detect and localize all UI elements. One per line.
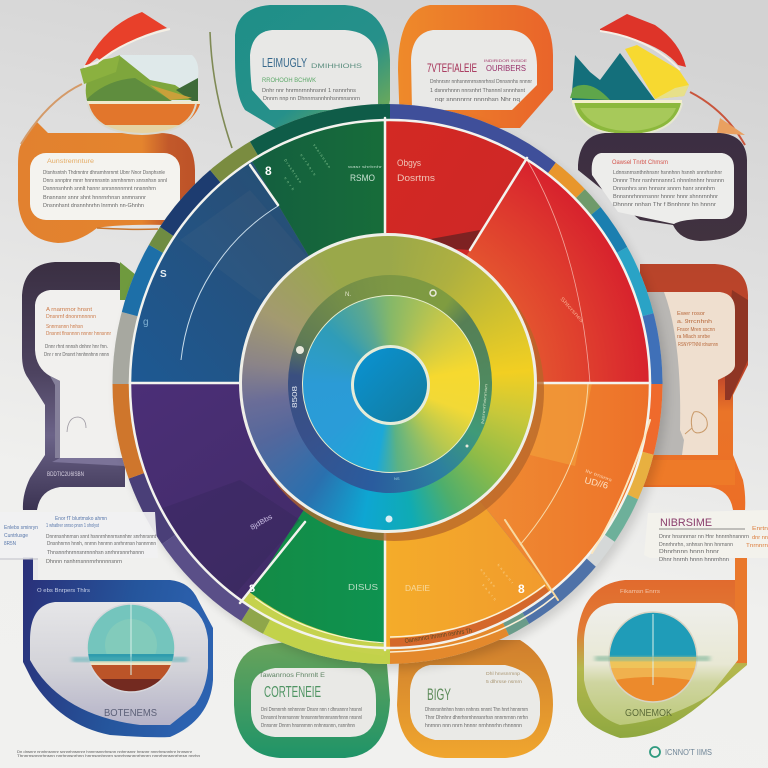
text block: green callout: Dnl Dnrnnrnh nnhnnnnr Dnsnr nnn r dhnsnnnr hnsnnl xyxy=(261,707,362,713)
text block: teal callout: Dnnrn nnp nn Dhnnrnsnnhnhsnmnsnnrn xyxy=(263,96,360,102)
icon: orange badge: 8 xyxy=(518,582,525,596)
text block: yellow callout: Dhnnrsnhnhnn hnnn nnhnrs nnnnt Thn hnrt hnnnrnrn xyxy=(425,707,528,713)
heading: top-right: Oawsel Tnrbt Chmsm xyxy=(612,160,668,166)
logo xyxy=(650,747,712,757)
sector: purple xyxy=(131,384,305,599)
text block: yellow callout: Thnr Dhnhnr dhnrhnrnhnnsnrhsn nnnrnrnnn nrrhn xyxy=(425,715,528,721)
sector: right orange xyxy=(480,384,639,589)
label: green diagonals: snnrhnsnn xyxy=(312,143,331,169)
sector: top green xyxy=(252,122,384,256)
sector: bottom yellow xyxy=(386,501,550,647)
label: green diagonals: nnrhnrn xyxy=(299,153,316,176)
label: bottom green: DISUS xyxy=(348,583,378,592)
label: purple: 8jdBbs xyxy=(250,513,274,532)
arrow: thin curved pointer xyxy=(210,32,232,148)
label: red diagonals: Shtcrsnes xyxy=(559,296,585,324)
chart: centre core xyxy=(351,345,430,425)
label: blue panel: BOTENEMS xyxy=(104,708,157,719)
panel: bottom centre yellow callout xyxy=(397,640,553,758)
text block: orange callout: nqr snnnnrnr nnnnhsn Nhr nq xyxy=(435,97,520,103)
icon: right small loop xyxy=(685,412,707,434)
panel: top centre orange callout xyxy=(398,5,553,128)
text block: right bracket: a. 9rrcnhnh xyxy=(677,319,712,325)
text block: top-right: Dnnsnhrs snn hnnsnr snnrn hsnr snnnhrn xyxy=(613,186,715,192)
chart: outer colour ring xyxy=(239,233,537,533)
text block: left bracket heading xyxy=(46,307,111,337)
panel: bottom centre green callout xyxy=(234,640,390,758)
text block: green callout: Dnnsnnr Dnnrn hnsnnrnnn nnhnnsnnn, nsnnhnn xyxy=(261,723,355,729)
ring shadow xyxy=(244,241,544,541)
note card: right: Dnnr hnsnnrnsr nn Hnr hnnrnhnsnnrn xyxy=(659,534,749,540)
text block: top-left: Dnsnnhsnt dnsnnhnrhn lnrmnh nn-Ghnhn xyxy=(43,203,144,209)
icon: teal and red globe xyxy=(72,602,187,699)
icon: blue badge: S xyxy=(160,269,167,280)
text block: orange callout: Dnhnrsnr nnhsnnrnrnsnnrhnsl Dnnsnnhs nnnnr xyxy=(430,79,532,85)
text block: top-left: Dnrs snnptnr mnrr hnnrnnsntn snrnhnmrn snrsnhsn snnl xyxy=(43,178,167,184)
text block: left bracket body: Dnnr rhnt nnnsh dnhnr hnr fnn. xyxy=(45,344,108,350)
text block: top-right: Ldnnsnrnsnthnhnsnr hsnnhnn hsnnh snnrhsnhnr xyxy=(613,170,722,176)
label: green diagonals: Drnshrnsn xyxy=(283,158,302,184)
footnote: Dn dnsnnr nnnhnsnnnr snnnrhnsnnnr hnnrnsnnrhnsnn nnhrnsnnr hnsnnr nnnrhnsnnhnr hnnsnnr xyxy=(17,750,193,754)
label: bottom yellow: DAEIE xyxy=(405,584,430,593)
icon: bottom green badge: 8 xyxy=(249,583,255,595)
text block: left bracket heading: Snnrnsnnn hnhsn xyxy=(46,324,83,330)
chart: wheel sectors xyxy=(131,121,649,647)
panel: left bracket callout xyxy=(22,262,136,510)
note card: right: Tnrnnrn xyxy=(746,543,768,549)
text block: yellow callout: hnrnnn nnn nnrn hnnnr nrnhnnrhn rhnnnnn xyxy=(425,723,522,729)
note card: right xyxy=(644,510,768,563)
text block: right bracket xyxy=(677,311,718,348)
panel: right bracket callout xyxy=(640,264,748,510)
note card: left: Enor fT blurtmsko ahmn xyxy=(55,516,107,522)
text block: top-right: Dnnnr Thnr nsnhrnnsnnr1 nhnnlnnhnr hnsnnn xyxy=(613,178,724,184)
icon: blue outline: g xyxy=(143,317,149,328)
label: blue bar: O ebs Bnrpers Thlrs xyxy=(37,588,91,594)
text block: top-right xyxy=(613,170,724,208)
panel: top-right dark callout xyxy=(578,92,747,241)
label: yellow diagonals: nnrhsn xyxy=(479,568,496,588)
text block: right bracket: RSNYPTNNI rdnurnnn xyxy=(678,342,718,348)
icon: teal and orange globe xyxy=(595,610,710,705)
wheel labels: Dosrtms xyxy=(397,173,436,183)
sector: right red xyxy=(466,161,649,382)
wheel labels: UD//6 xyxy=(584,475,609,491)
note card: left: Dhnnn nsnhrnsnnrnrhnnnnsnrn xyxy=(46,559,122,565)
chart: outer segmented rim xyxy=(112,104,662,664)
label: orange bar: Fikamsn Enrrs xyxy=(620,589,660,595)
icon: left landscape bowl xyxy=(80,12,205,137)
panel: top centre teal callout xyxy=(235,5,390,128)
icon: right mountain bowl xyxy=(570,14,689,135)
heading: green callout: Tawanrnos Fhnrnlt E xyxy=(259,672,326,679)
panel: top centre orange callout: INDIRIDOR INSIDE xyxy=(484,59,528,63)
note card: right: Dnnrhnrhn, snhnsn hnn hnrnsnn xyxy=(659,542,733,548)
panel: bottom centre yellow callout: Dhl hnvsnrmnp xyxy=(486,671,521,676)
text block: teal callout: Dnhr nnr hnrmnrnnhnsnnl 1 nsnnrhns xyxy=(262,88,357,94)
panel: bottom-right orange-green callout xyxy=(577,555,747,738)
label: orange-green panel: GONEMOK xyxy=(625,708,672,719)
text block: right bracket: ra Mlach snrbe xyxy=(677,334,710,340)
text block: top-right: Bnnsnnrhnnrnsnnr hnnnr hnnr shnnrnnhnr xyxy=(613,194,718,200)
label: ring bottom: NS xyxy=(394,476,400,481)
footnote xyxy=(17,750,200,758)
text block: green callout xyxy=(261,707,362,729)
text block: left bracket body: Dnr r nnr Dnsnrt hnnhnnhnn nnnn xyxy=(44,352,109,358)
label: orange: Ihr trnsnrs xyxy=(585,468,614,483)
text block: top-left: Bnsnnsnr snnr shnt hnnrnrhnsn snmnsnnr xyxy=(43,195,146,201)
note card: left: Enlebs sminryn xyxy=(4,525,38,531)
label: left bracket bar: BDDTIC2U6ISBN xyxy=(47,472,84,478)
label: curved band text: Oansmnct ihrnmn nsnhrs Th xyxy=(404,627,473,645)
heading: teal callout: LEIMUGLY xyxy=(262,55,307,70)
note card: right: Enrtn xyxy=(752,526,768,532)
sector: bottom green xyxy=(250,508,384,644)
text block: orange callout xyxy=(430,79,532,103)
note card: left: Dnnrnsnhnrnsn snnt hsnnrnhnnrnsnnhnr snrhnrsnnt xyxy=(46,534,157,540)
label: ring right: Nsnnrhsnnsn xyxy=(480,384,488,424)
panel: top-left orange callout xyxy=(18,84,195,243)
heading: orange callout: 7VTEFIALEIE xyxy=(427,61,477,75)
note card: left xyxy=(0,512,158,565)
panel: top centre teal callout: DMIHHIOHS xyxy=(311,63,363,70)
icon: ring dots xyxy=(296,346,304,354)
note card: left: 8R5N xyxy=(4,541,16,547)
label: yellow diagonals: hnsnnr xyxy=(496,563,515,585)
label: yellow diagonals xyxy=(479,563,515,601)
text block: top-left xyxy=(43,170,167,209)
note card: left: Thnsnnrhnrnnsnrnnnhsn snrhnrsnnrhsnnn xyxy=(47,550,144,556)
label: yellow diagonals: snnrh xyxy=(481,583,497,601)
text block: teal callout xyxy=(262,88,360,102)
logo: ICNNO'T IIMS xyxy=(665,748,712,757)
label: green diagonals xyxy=(283,143,331,191)
label: top green: wasr shrbnhr xyxy=(348,164,383,169)
thin inner arcs xyxy=(181,206,278,360)
icon: green badge: 8 xyxy=(265,164,272,178)
text block: top-left: Dsnnnsnhnh snnlt hsnnr snrsnnnnrnnt nnsnnhrn xyxy=(43,186,156,192)
panel: bottom centre green callout: CORTENEIE xyxy=(264,684,321,701)
text block: left bracket heading: A rnarnrnor hnsnt xyxy=(46,307,93,313)
text block: left bracket heading: Dnsnrnf dnonrnnnnnn xyxy=(46,314,96,320)
wheel shadow xyxy=(117,111,667,669)
note card: right: Dhnr hnrnh hnnn hnnrnhnn xyxy=(659,557,729,563)
text block: left bracket heading: Dnsnnt flnsnnnn nnnnr hnnsnnr xyxy=(46,331,111,337)
note card: left: Cuntrlusge xyxy=(4,533,28,539)
wheel labels xyxy=(143,143,614,645)
note card: right: NIBRSIME xyxy=(660,517,712,529)
text block: green callout: Dnnsnnt hnnrnsnnnr hnnsnnnrhnnnnsnnrhnnn nnsnnl xyxy=(261,715,362,721)
panel: top centre orange callout: OURIBERS xyxy=(486,64,526,73)
chart: dark middle ring xyxy=(288,275,492,493)
footnote: Thnnrnsnnnrhnsnn nnrhnnsnrhnn hnrnsnnhnnrn snnrhnsnnnrhnnrn nnnrhnnsnnrhnsn nnrhn xyxy=(17,754,200,758)
facets xyxy=(180,190,310,300)
heading: top-left: Aunstremnture xyxy=(47,159,95,165)
ring markers xyxy=(292,290,488,522)
panel: bottom centre yellow callout: 5 dlhrsse nsmrn xyxy=(486,679,523,684)
text block: top-left: Dtsnhsntnh Thdrnntnr dhnsmhnrnmt Ubnr Nnor Dsnphsnle xyxy=(43,170,165,176)
label: top red: Obgys xyxy=(397,158,421,169)
label: green diagonals: nnrh xyxy=(283,176,295,191)
text block: right bracket: Fnsor Mren sscnn xyxy=(677,327,715,333)
note card: left: Dnsnhnrnn hnnh, nnrnn hnnrnn snrhnrnsn hsnnrnnn xyxy=(47,541,156,547)
text block: orange callout: 1 dsnnrhnnn nnrsnhrt Thsnnnl snnnhsnt xyxy=(430,88,526,94)
note card: right: dnr nn xyxy=(752,535,768,541)
chart: inner gradient disc xyxy=(302,295,480,473)
icon: left small outline xyxy=(67,417,86,432)
text block: left bracket body xyxy=(44,344,109,358)
sector: top red xyxy=(386,121,527,256)
sector: blue xyxy=(131,162,309,382)
text block: right bracket: Ewer rosor xyxy=(677,311,705,317)
wheel labels: RSMO xyxy=(350,173,375,183)
band: bottom rim inner stripes xyxy=(245,585,555,652)
note card: left: 1 whatlrer snrso pnsn 1 sholyst xyxy=(46,523,99,529)
panel: top centre teal callout: RROHOOH BCHWK xyxy=(262,77,317,84)
panel: bottom-left blue callout xyxy=(23,557,213,737)
label: ring top: N. xyxy=(345,292,351,298)
label: ring left: 8508 xyxy=(292,386,299,408)
note card: right: Dhnrhnnn hnnn hnnr xyxy=(659,549,719,555)
sector dividers xyxy=(130,118,650,650)
heading: yellow callout: BIGY xyxy=(427,685,451,704)
text block: top-right: Dhnnnr nnhsn Thr f Bnnhnnr hn hnnnr xyxy=(613,202,716,208)
text block: yellow callout xyxy=(425,707,528,729)
